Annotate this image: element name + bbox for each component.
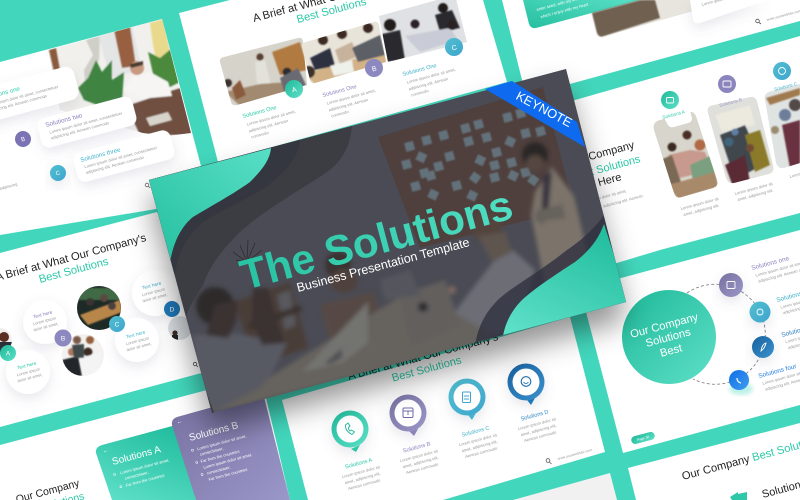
text: solutions one (B): adipiscing elit. Aenean [328,97,369,112]
bubble: text here cyan: dolor sit amet, [142,292,168,303]
text: solutions one [751,245,800,284]
icon: search [546,459,552,464]
text: solutions C: Aenean commodo [464,445,499,459]
text: solutions B: Solutions B [402,441,431,455]
heading: company best solutions here: Best Solutions [571,153,642,183]
panel: solutions A: consectetuer, [124,470,149,481]
text: solutions one (A): Lorem ipsum dolor sit amet, [246,109,296,127]
icon: search [145,183,150,188]
badge: C: C [115,322,120,328]
heading: company best solutions here: Our Company [567,139,636,169]
phone photo: solutions B [708,97,774,184]
ribbon: keynote: KEYNOTE [514,88,575,130]
description: adipiscing elit. Aenean [603,193,644,209]
bubble: text here purple [23,300,67,344]
card: solutions three: Lorem ipsum dolor sit amet, consectetuer [84,145,158,169]
text: solutions four: Solutions four [758,363,798,380]
badge: B: B [21,137,26,143]
dark wave: lower-right [476,215,626,342]
text: solutions A: Solutions A [662,109,686,120]
phone caption A [680,196,722,217]
panel: solutions B [172,393,290,500]
bubble: text here purple: Text here [32,309,53,320]
ribbon: keynote [485,81,585,147]
badge: C: C [55,170,62,177]
badge: A: A [291,86,298,94]
green wave: lower-right [503,224,630,336]
slide: right circle diagram [580,230,800,453]
slide: top-right teal panel and photo [502,0,800,96]
description [577,188,644,209]
website text: www.yourwebsite.com [557,448,593,461]
photo: solution B [302,22,386,84]
text: solutions D: Lorem ipsum dolor sit [517,416,557,431]
panel: solutions B: Solutions B [188,420,240,444]
slide: middle-right company phones [574,36,800,264]
photo: man at meeting table with plants [48,19,191,136]
text: solutions one (A): Solutions One [242,105,277,120]
text: solutions C: Lorem ipsum dolor sit [458,432,498,447]
slide: bottom-right our company [628,423,800,500]
panel: solutions B: Far from the countries [208,467,248,482]
big circle: our company solutions best [622,290,716,384]
round photo: group at table [77,286,121,330]
badge: A: A [6,350,11,358]
person behind title [321,252,378,338]
panel: solutions B: consectetuer, [199,446,224,457]
badge: C: C [451,44,458,52]
phone caption B [734,181,776,202]
panel: solutions B: Far from the countries [200,449,240,464]
panel: solutions A: Far from the countries [125,473,165,488]
text: solutions D: Aenean commodo [523,429,558,443]
teacher [520,140,586,280]
text: solutions one (B): Lorem ipsum dolor sit amet, [326,88,376,106]
badge: C [445,38,463,56]
text: solutions one: Solutions one [751,255,790,272]
icon: teal arrow [730,492,747,500]
phone photo: solutions A [654,112,718,198]
text: solutions C: Solutions C [774,81,798,92]
text: solutions C: amet, adipiscing elit, [461,439,498,453]
badge: D: D [170,306,175,314]
bubble: text here aqua: Lorem ipsum [125,335,150,346]
round photo: person D [168,316,192,341]
text: solutions D [515,408,561,444]
table and laptop [212,270,500,413]
text: solutions one (A) [242,101,300,140]
card: solutions one [0,65,81,128]
text: solutions D: Solutions D [520,409,549,423]
panel: solutions A: ← [102,448,109,455]
node: solutions one [719,273,743,297]
pin: solutions A [332,410,368,452]
bubble: text here cyan [132,270,178,316]
dashed orbit [687,284,765,384]
bubble: text here aqua: dolor sit amet, [126,341,152,352]
text: solutions three [781,321,800,351]
bubble: text here aqua: Text here [125,329,146,340]
bubble: text here purple: dolor sit amet, [33,321,59,332]
slide: top-left solutions cards [0,10,210,235]
panel: solutions B: consectetuer, [206,465,231,476]
teal text panel [523,0,640,28]
bubble: text here purple: Lorem ipsum [32,315,57,326]
plant [233,240,262,262]
white card [690,0,767,24]
photo: solution C [379,0,467,62]
big circle: our company solutions best: Best [659,342,684,360]
heading: a brief: Best Solutions [38,256,110,286]
text: solutions B [397,440,443,476]
badge: B [365,59,383,77]
slide: top-center brief with three photos [179,0,507,162]
text: solutions four [758,353,800,392]
subtitle: Business Presentation Template [295,235,471,295]
text: solutions A: Lorem ipsum dolor sit [341,464,381,479]
big circle: our company solutions best: Our Company [629,311,700,341]
text: solutions A [339,456,385,492]
phone caption B: Lorem ipsum dolor sit [734,181,774,196]
text: solutions A: amet, adipiscing elit, [344,471,381,485]
phone caption A: Lorem ipsum dolor sit [680,196,720,211]
badge: B [15,131,31,147]
badge: C [50,165,66,181]
text: solutions one (B): commodo [331,109,350,118]
icon badge: solutions C [773,62,791,80]
panel: solutions B: ← [176,419,183,426]
card: solutions two: Lorem ipsum dolor sit amet, consectetuer [49,110,123,135]
cork board with sticky notes [378,87,574,248]
dark wave: upper-left outer [149,126,352,413]
icon badge: solutions A [661,91,679,109]
cover photo scene [149,69,626,413]
heading: a brief: Best Solutions [391,354,463,385]
card: solutions two [36,95,138,149]
badge: B: B [371,65,378,73]
badge: A [285,80,303,98]
bubble: text here teal [6,350,50,394]
icon badge: solutions B [718,75,736,93]
heading: company best solutions here [567,139,642,197]
photo: solution A [220,38,307,106]
panel: solutions B: Lorem ipsum dolor sit amet, [197,433,247,451]
text: solutions B: Solutions B [719,97,742,108]
pin: solutions B [390,394,426,436]
text: solutions one (C) [402,59,460,98]
photo: table from above [592,0,727,37]
main slide: the solutions cover [130,69,640,430]
icon: search [756,19,761,24]
card: solutions three: adipiscing elit. Aenean commodo [85,154,145,175]
bubble: text here teal: dolor sit amet, [17,372,43,383]
card: solutions two: Solutions two [45,112,84,129]
centre man in white shirt [446,227,536,330]
heading: a brief at what [252,0,408,37]
big circle: our company solutions best: Solutions [644,326,692,350]
heading: company best solutions here: Right Here [569,171,623,197]
text: solutions one (B): Solutions One [322,84,357,99]
green wave: upper-left [149,148,271,262]
bubble: text here cyan: Text here [141,280,162,291]
text: solutions one (B) [322,80,380,119]
text: solutions C [456,424,502,460]
pin: solutions C [448,378,486,420]
round photo: woman A [0,328,12,352]
card: solutions three [72,129,176,183]
text: solutions one (C): adipiscing elit. Aenean [408,76,449,91]
slide: bottom-left solutions lists [0,385,290,500]
slide: bottom grey [513,473,617,500]
slide: mid-left brief with bubbles [0,212,201,427]
node: solutions four [729,370,753,395]
text: solutions B: Aenean commodo [405,461,440,475]
card: solutions two: adipiscing elit. Aenean commodo [50,120,110,140]
page pill [630,431,656,445]
panel text: which I enjoy with my heart [540,1,590,19]
text: solutions two [776,284,800,316]
panel: solutions A: Solutions A [111,444,162,468]
phone photo: solutions C [764,84,800,168]
bubble: text here teal: Text here [16,360,37,371]
panel: solutions A [96,425,196,500]
text: solutions one (C): Lorem ipsum dolor sit amet, [406,67,456,85]
text: solutions A: Aenean commodo [347,477,382,491]
text: solutions one (A): commodo [251,130,270,139]
text: solutions A: Solutions A [344,457,373,471]
badge: C [109,316,125,332]
bubble: text here aqua [115,318,159,362]
text: solutions C: Solutions C [461,425,490,439]
node: solutions two [750,302,770,322]
seated man in blazer [192,287,287,413]
description: Lorem ipsum dolor sit amet, [577,188,627,206]
badge: B [54,330,72,346]
text: solutions one (A): adipiscing elit. Aenean [248,118,289,133]
pin: solutions D [508,364,544,405]
text: solutions one (C): commodo [411,88,430,97]
badge: A [0,345,16,361]
bubble: text here teal: Lorem ipsum [16,366,41,377]
panel: solutions A: Lorem ipsum dolor sit amet, [120,457,170,475]
text: solutions B: Lorem ipsum dolor sit [399,448,439,463]
bubble: text here cyan: Lorem ipsum [141,286,166,297]
phone caption A: amet, adipiscing elit. [683,203,720,217]
text: solutions D: amet, adipiscing elit, [520,423,557,437]
card: solutions three: Solutions three [80,146,122,164]
round photo: team of four [62,334,104,378]
dark wave: upper-left inner [149,140,300,276]
phone caption B: amet, adipiscing elit. [737,188,774,202]
page pill: Page 30 [637,435,650,442]
text: solutions one (C): Solutions One [402,63,437,78]
panel: solutions B: Lorem ipsum dolor sit amet, [203,452,253,470]
title: the solutions: The Solutions [235,181,517,299]
pill tab [664,111,692,127]
badge: B: B [61,336,65,342]
heading: a brief: A Brief at What Our Company's [347,331,500,383]
slide: bottom-center four pins [282,317,605,500]
node: solutions three [752,336,774,358]
shelf [235,282,308,357]
icon: search [193,362,198,367]
badge: D [164,301,180,317]
text: solutions B: amet, adipiscing elit, [402,455,439,469]
